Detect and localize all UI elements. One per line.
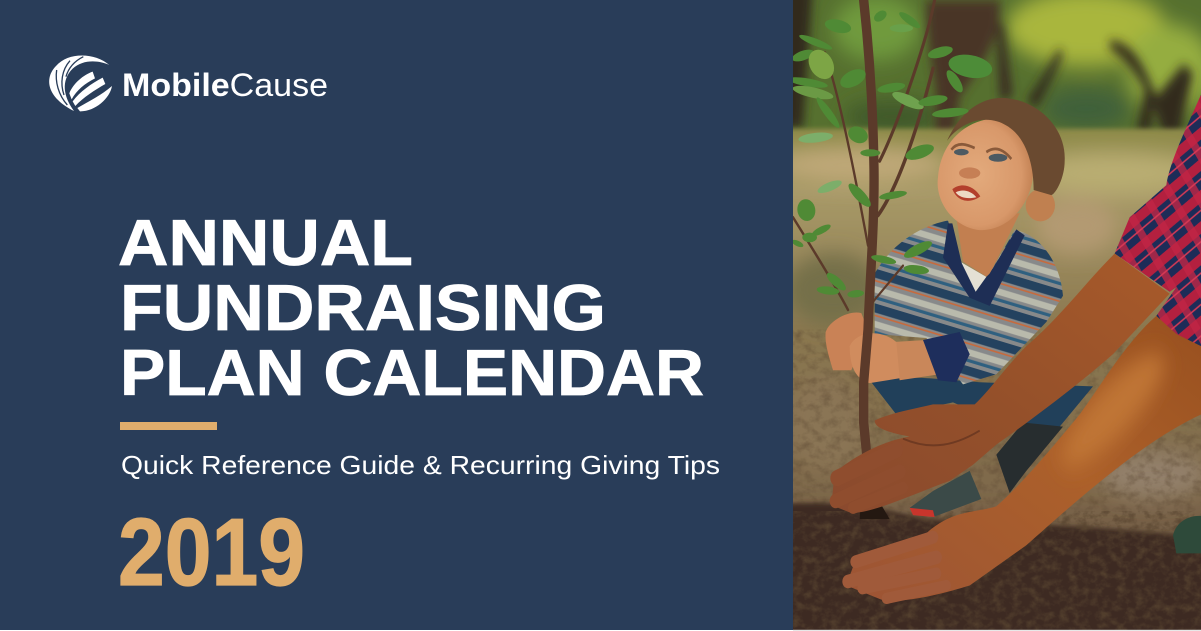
blurred forest background bbox=[780, 0, 1201, 161]
adult shirt sleeves bbox=[1115, 95, 1201, 346]
collar bbox=[943, 223, 1025, 306]
white bottom edge bbox=[793, 630, 1201, 631]
boy hair bbox=[947, 98, 1065, 195]
logo: MobileCause bbox=[49, 55, 328, 111]
title bbox=[118, 206, 704, 409]
green object at right edge bbox=[1173, 516, 1201, 553]
panel: navy cover panel bbox=[0, 0, 793, 630]
sapling leaves bbox=[788, 8, 993, 298]
boy hands bbox=[825, 312, 900, 383]
boy ear bbox=[1026, 189, 1055, 221]
title: FUNDRAISING bbox=[120, 271, 606, 344]
title: PLAN CALENDAR bbox=[120, 336, 704, 409]
sapling root ball bbox=[860, 467, 890, 519]
icon: striped globe bbox=[49, 55, 112, 111]
adult upper arm and hand bbox=[831, 254, 1170, 513]
sapling bbox=[788, 0, 993, 519]
title: ANNUAL bbox=[118, 206, 413, 279]
soil bbox=[773, 503, 1201, 631]
boy bbox=[825, 98, 1093, 517]
accent rule bbox=[120, 422, 217, 430]
photo: child and adult planting a sapling bbox=[793, 0, 1201, 631]
year: 2019 bbox=[118, 499, 305, 606]
boy legs and shoes bbox=[871, 378, 1093, 517]
logo wordmark: MobileCause bbox=[122, 67, 328, 103]
neck bbox=[956, 213, 1020, 278]
ground bbox=[766, 129, 1201, 571]
eyes, nose and mouth bbox=[951, 144, 1011, 201]
sapling stems bbox=[793, 0, 935, 479]
boy forearm and cuff bbox=[893, 340, 940, 380]
boy striped shirt bbox=[875, 221, 1063, 384]
adult lower arm and hand bbox=[846, 316, 1201, 601]
boy face bbox=[938, 118, 1033, 230]
subtitle: Quick Reference Guide & Recurring Giving Tips bbox=[121, 450, 720, 480]
